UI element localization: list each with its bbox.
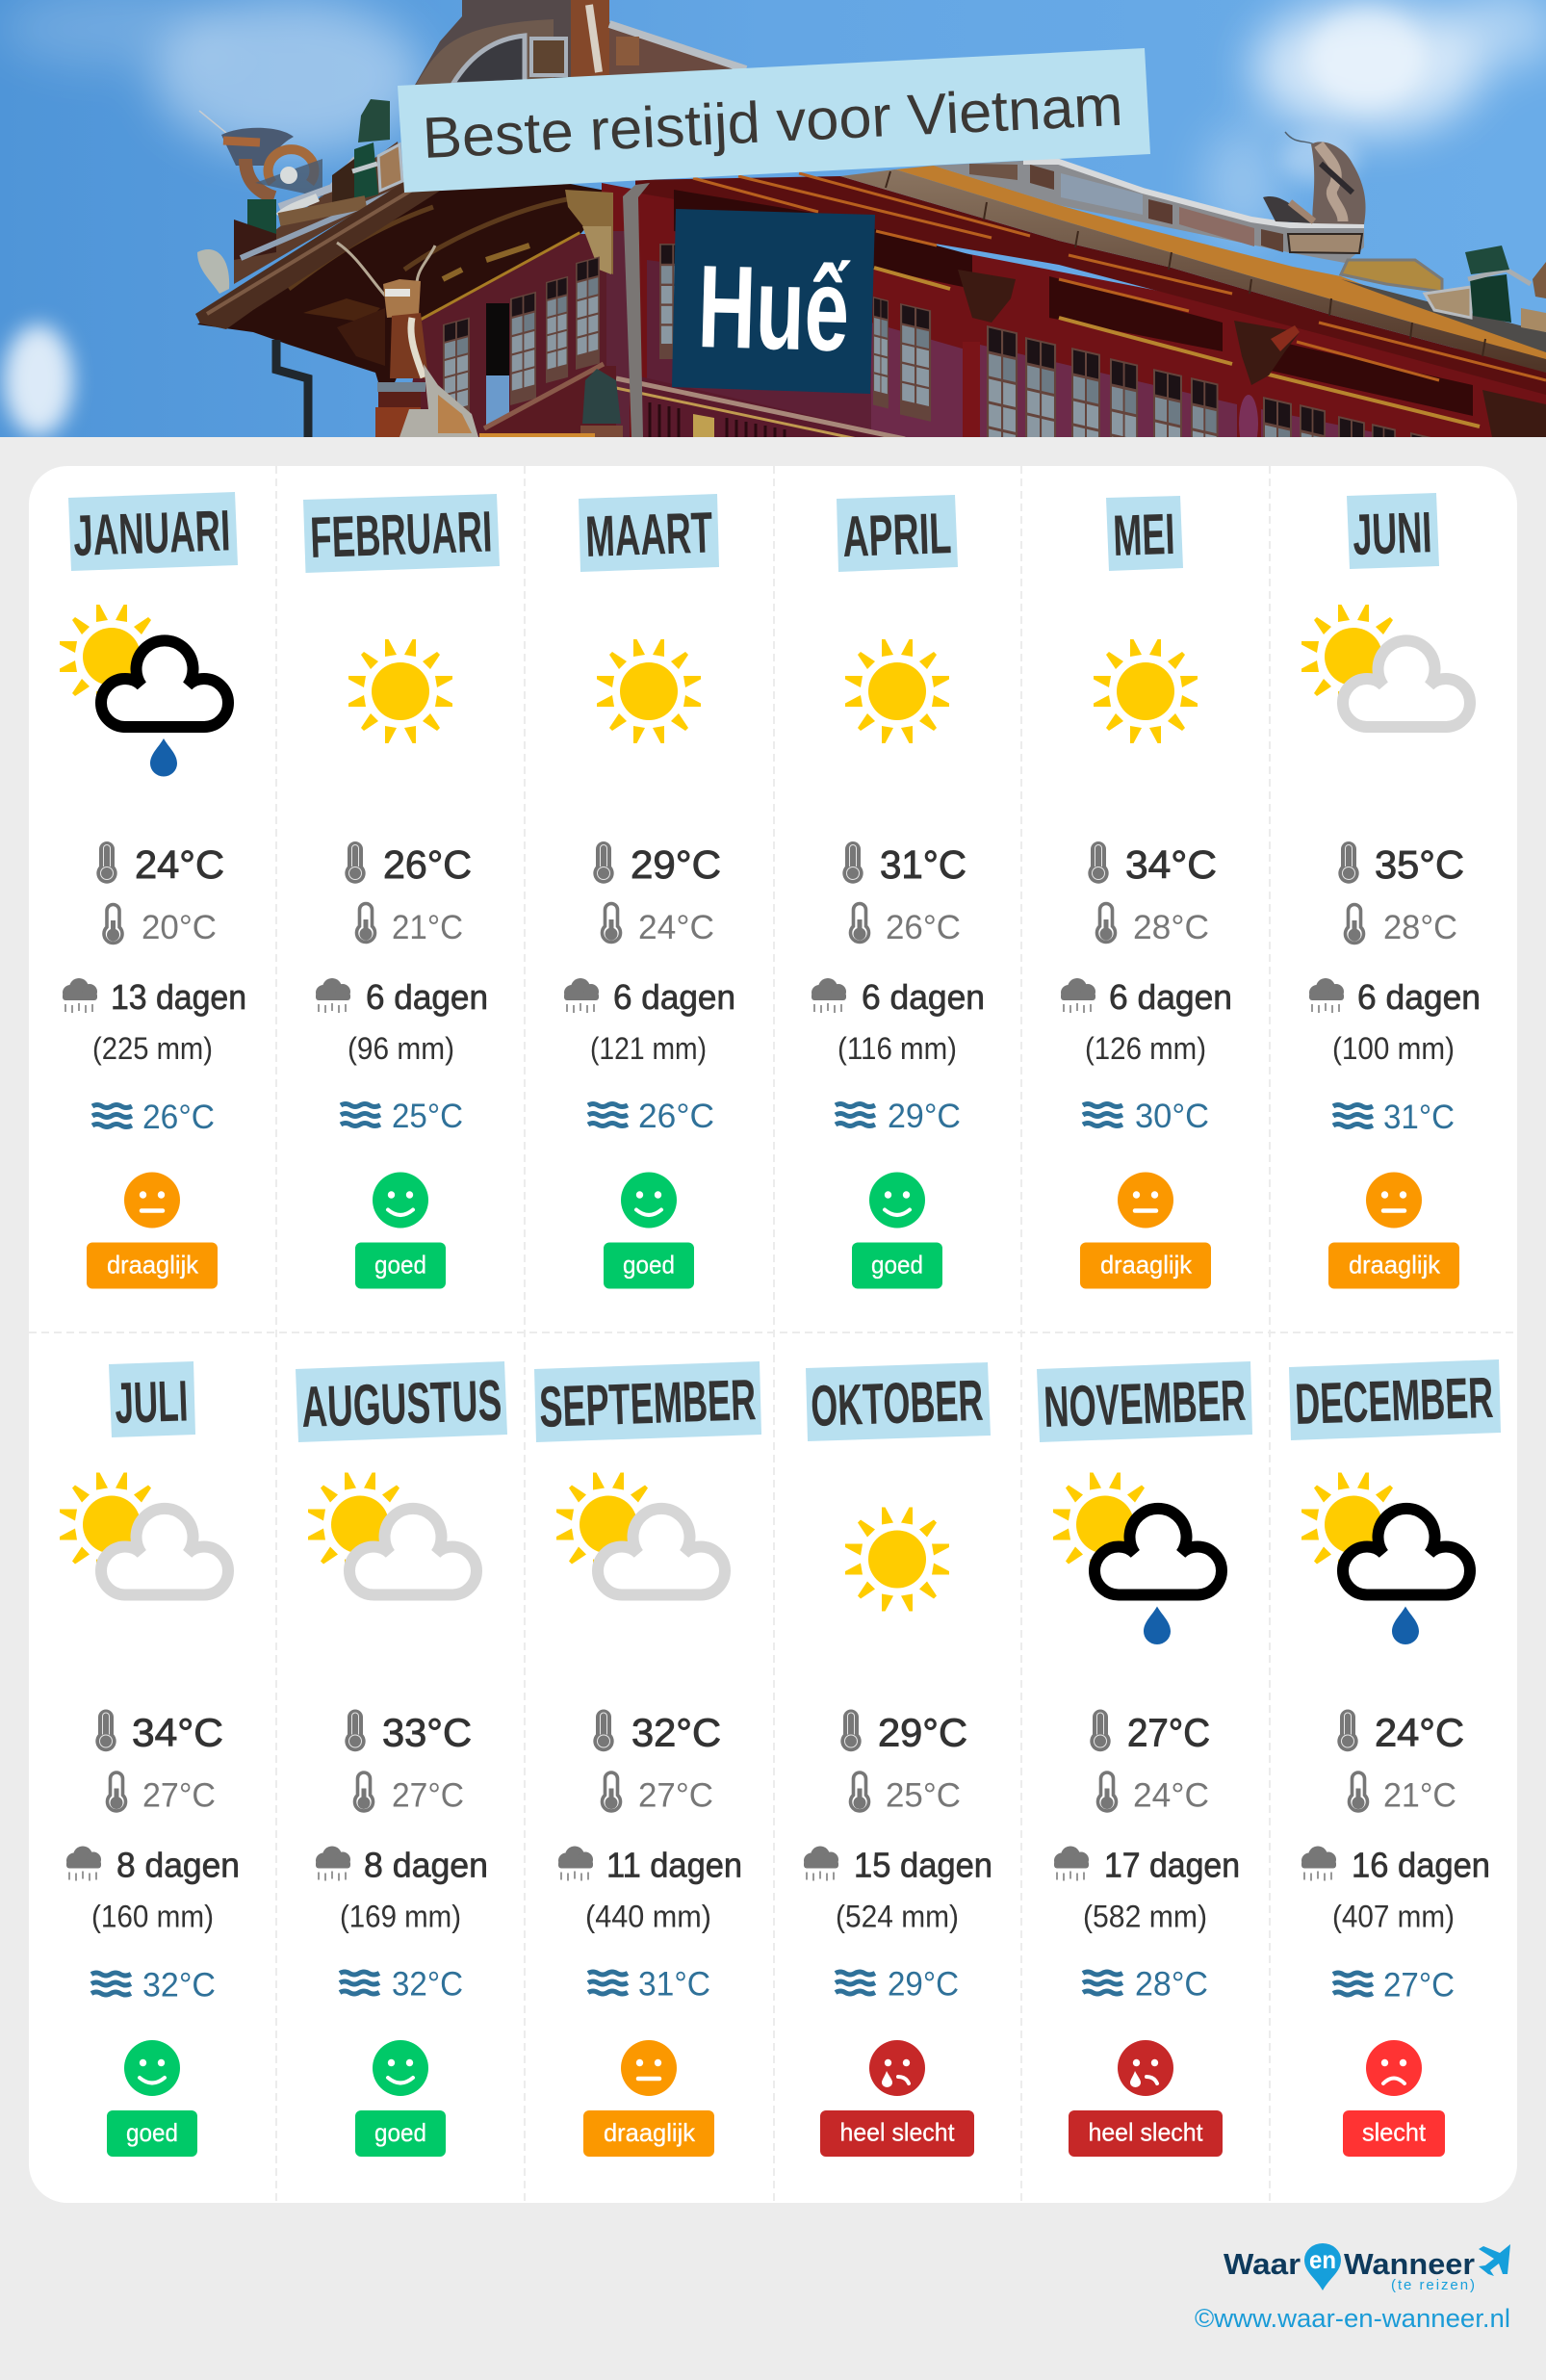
- rating face: [124, 2040, 180, 2096]
- rating face: [621, 2040, 677, 2096]
- icon: sun and rain cloud: [1053, 1473, 1222, 1644]
- sea temperature: 30°C: [1135, 1098, 1209, 1135]
- rating badge: [604, 1242, 694, 1288]
- rain days: [1054, 1845, 1240, 1885]
- month tag: [1347, 493, 1439, 569]
- column: augustus: [296, 1361, 507, 2157]
- min temperature: [851, 1772, 961, 1814]
- sea temperature: [341, 1098, 463, 1135]
- month tag: [109, 1361, 195, 1437]
- rainfall: (440 mm): [585, 1899, 711, 1933]
- month tag: APRIL: [841, 501, 952, 569]
- min temperature: [1097, 1772, 1209, 1814]
- max temperature: 24°C: [1375, 1710, 1464, 1754]
- rainfall: (96 mm): [348, 1031, 454, 1066]
- rainfall: (100 mm): [1332, 1031, 1455, 1066]
- sea temperature: 26°C: [638, 1098, 714, 1135]
- rainfall: (524 mm): [836, 1899, 959, 1933]
- rainfall: (126 mm): [1085, 1031, 1206, 1066]
- rating badge: goed: [623, 1250, 675, 1279]
- rating badge: goed: [871, 1250, 923, 1279]
- rain days: 6 dagen: [1109, 977, 1232, 1017]
- column: mei: [1061, 496, 1232, 1288]
- max temperature: [1088, 841, 1217, 887]
- max temperature: 35°C: [1375, 842, 1464, 887]
- min temperature: 21°C: [392, 909, 463, 946]
- ridge fence: [934, 161, 1364, 263]
- rating badge: heel slecht: [1088, 2118, 1203, 2147]
- max temperature: [1338, 841, 1464, 887]
- right dragon ornament: [1263, 132, 1366, 224]
- min temperature: [108, 1772, 216, 1814]
- rating badge: heel slecht: [839, 2118, 955, 2147]
- city name box: Huế: [672, 209, 875, 394]
- month tag: [303, 494, 500, 573]
- city name box: Huế: Huế: [696, 241, 851, 375]
- rain days: 15 dagen: [854, 1845, 992, 1885]
- month tag: JANUARI: [72, 498, 231, 568]
- max temperature: 29°C: [631, 842, 721, 887]
- sea temperature: [1333, 1966, 1455, 2005]
- min temperature: 28°C: [1133, 909, 1209, 946]
- rainfall: (582 mm): [1083, 1899, 1207, 1933]
- stair rail and statue: [484, 366, 616, 437]
- rating badge: [1343, 2110, 1445, 2157]
- month tag: [837, 495, 958, 572]
- rain days: 6 dagen: [862, 977, 985, 1017]
- month tag: [1037, 1361, 1252, 1442]
- max temperature: [345, 841, 472, 887]
- rating face: [621, 1173, 677, 1229]
- month tag: [68, 492, 238, 571]
- max temperature: 29°C: [878, 1710, 967, 1754]
- rain days: 11 dagen: [606, 1845, 742, 1885]
- brackets: [1234, 321, 1300, 385]
- column: juni: [1301, 493, 1481, 1288]
- column: februari: [303, 494, 500, 1288]
- max temperature: 24°C: [135, 842, 224, 887]
- rain days: 6 dagen: [366, 977, 488, 1017]
- min temperature: [1346, 905, 1457, 946]
- rating face: [1118, 2040, 1173, 2096]
- max temperature: 27°C: [1127, 1710, 1210, 1754]
- rating face: [869, 1173, 925, 1229]
- rating badge: [1080, 1242, 1211, 1288]
- rain days: 8 dagen: [364, 1845, 488, 1885]
- max temperature: 33°C: [382, 1710, 472, 1754]
- icon: sun and grey cloud: [60, 1473, 228, 1594]
- lower balcony and railing: [641, 377, 884, 437]
- drain pipe: [276, 340, 308, 437]
- max temperature: [1090, 1710, 1210, 1754]
- icon: sun and rain cloud: [1301, 1473, 1470, 1644]
- min temperature: 28°C: [1383, 909, 1457, 946]
- icon: sun: [1094, 639, 1198, 743]
- title banner: Beste reistijd voor Vietnam: [421, 73, 1124, 170]
- max temperature: 31°C: [880, 842, 966, 887]
- sea temperature: [588, 1966, 710, 2003]
- sea temperature: 31°C: [1383, 1099, 1455, 1136]
- upper dark beams, right side: [635, 176, 1546, 395]
- rating face: [1366, 2040, 1422, 2096]
- icon: map pin: en: [1309, 2245, 1336, 2274]
- logo: Waar en Wanneer: Wanneer: [1344, 2247, 1475, 2281]
- month tag: [806, 1362, 991, 1441]
- rating face: [869, 2040, 925, 2096]
- sea temperature: [92, 1099, 215, 1136]
- sea temperature: [1083, 1966, 1208, 2003]
- max temperature: [345, 1710, 472, 1754]
- rating face: [1366, 1173, 1422, 1229]
- rating badge: draaglijk: [107, 1250, 199, 1279]
- max temperature: [593, 1710, 721, 1754]
- month tag: [534, 1361, 761, 1442]
- month tag: MEI: [1112, 502, 1175, 568]
- min temperature: 25°C: [886, 1777, 961, 1814]
- column: juli: [60, 1361, 240, 2157]
- column: april: [812, 495, 985, 1288]
- rainfall: (407 mm): [1332, 1899, 1455, 1933]
- rain days: 13 dagen: [111, 977, 246, 1017]
- min temperature: 27°C: [392, 1777, 464, 1814]
- metal pipe: [623, 183, 650, 437]
- max temperature: [593, 841, 721, 887]
- rating badge: goed: [374, 1250, 426, 1279]
- max temperature: 34°C: [1125, 842, 1217, 887]
- rating badge: goed: [374, 2118, 426, 2147]
- rating badge: [355, 2110, 446, 2157]
- month tag: [296, 1361, 507, 1442]
- orange roof surface: [895, 166, 1546, 361]
- sea temperature: 29°C: [888, 1966, 959, 2003]
- rating badge: draaglijk: [604, 2118, 696, 2147]
- windows: [443, 244, 1430, 437]
- month tag: [1106, 496, 1183, 571]
- sea temperature: 29°C: [888, 1098, 961, 1135]
- icon: plane: [1479, 2244, 1510, 2276]
- month tag: JUNI: [1352, 500, 1432, 567]
- icon: sun: [845, 1508, 949, 1612]
- rainfall: (121 mm): [590, 1031, 707, 1066]
- icon: sun: [597, 639, 701, 743]
- rain days: 8 dagen: [116, 1845, 240, 1885]
- month tag: OKTOBER: [810, 1368, 984, 1438]
- left gutter: [195, 183, 445, 329]
- min temperature: [1097, 903, 1209, 946]
- left ridge dragon ornament: [197, 99, 404, 294]
- row: second half of the year: [60, 1359, 1501, 2157]
- copyright: ©www.waar-en-wanneer.nl: [1195, 2304, 1510, 2333]
- max temperature: 32°C: [631, 1710, 721, 1754]
- rating badge: [852, 1242, 942, 1288]
- rating face: [124, 1173, 180, 1229]
- icon: map pin: [1304, 2243, 1341, 2290]
- rating badge: slecht: [1362, 2118, 1427, 2147]
- logo: Waar en Wanneer: [1224, 2243, 1510, 2293]
- rainfall: (225 mm): [92, 1031, 213, 1066]
- min temperature: [104, 905, 217, 946]
- rating badge: [355, 1242, 446, 1288]
- min temperature: [354, 1772, 464, 1814]
- title banner: [398, 48, 1150, 193]
- month tag: [579, 494, 719, 572]
- max temperature: [840, 1710, 967, 1754]
- rating badge: draaglijk: [1100, 1250, 1193, 1279]
- month tag: JULI: [114, 1368, 189, 1436]
- rating face: [373, 2040, 428, 2096]
- column: maart: [564, 494, 735, 1288]
- column: januari: [60, 492, 246, 1288]
- rainfall: (116 mm): [837, 1031, 957, 1066]
- rating face: [1118, 1173, 1173, 1229]
- rating badge: [820, 2110, 974, 2157]
- rating badge: [1328, 1242, 1459, 1288]
- min temperature: 27°C: [638, 1777, 713, 1814]
- dragon post: [337, 243, 595, 437]
- sea temperature: 26°C: [142, 1099, 215, 1136]
- icon: sun and grey cloud: [308, 1473, 477, 1594]
- sea temperature: [340, 1966, 463, 2003]
- column: november: [1037, 1361, 1252, 2157]
- sea temperature: [91, 1966, 216, 2005]
- sea temperature: [836, 1098, 961, 1135]
- rating badge: [1069, 2110, 1223, 2157]
- rating badge: goed: [126, 2118, 178, 2147]
- rain days: [316, 977, 488, 1017]
- rating badge: [87, 1242, 218, 1288]
- max temperature: [95, 1710, 223, 1754]
- max temperature: [1337, 1710, 1464, 1754]
- sea temperature: 31°C: [638, 1966, 710, 2003]
- month tag: NOVEMBER: [1043, 1368, 1247, 1439]
- min temperature: 24°C: [1133, 1777, 1209, 1814]
- min temperature: 27°C: [142, 1777, 216, 1814]
- sea temperature: 32°C: [392, 1966, 463, 2003]
- sea temperature: [1083, 1098, 1209, 1135]
- gable: [414, 0, 571, 87]
- month tag: AUGUSTUS: [300, 1368, 502, 1439]
- min temperature: [603, 903, 714, 946]
- rain days: 6 dagen: [1357, 977, 1481, 1017]
- min temperature: [851, 903, 961, 946]
- icon: sun and grey cloud: [556, 1473, 725, 1594]
- month tag: MAART: [584, 500, 713, 569]
- sea temperature: [588, 1098, 714, 1135]
- icon: sun and rain cloud: [60, 605, 228, 776]
- min temperature: 21°C: [1383, 1777, 1456, 1814]
- rain days: 17 dagen: [1104, 1845, 1240, 1885]
- min temperature: [603, 1772, 713, 1814]
- max temperature: [96, 841, 224, 887]
- sea temperature: 27°C: [1383, 1966, 1455, 2005]
- max temperature: 26°C: [383, 842, 472, 887]
- column: oktober: [804, 1362, 992, 2157]
- main wall: [602, 183, 1546, 437]
- column: december: [1289, 1359, 1501, 2157]
- left eave underside: [197, 184, 602, 382]
- panel: climate table card: [29, 466, 1517, 2203]
- icon: sun: [348, 639, 452, 743]
- max temperature: [842, 841, 966, 887]
- month tag: FEBRUARI: [309, 499, 493, 570]
- logo: Waar en Wanneer: Waar: [1224, 2247, 1301, 2281]
- sea temperature: [836, 1966, 959, 2003]
- min temperature: 26°C: [886, 909, 961, 946]
- rating badge: [583, 2110, 714, 2157]
- column: september: [534, 1361, 761, 2157]
- min temperature: 24°C: [638, 909, 714, 946]
- icon: sun and grey cloud: [1301, 605, 1470, 727]
- rainfall: (169 mm): [340, 1899, 461, 1933]
- sea temperature: [1333, 1099, 1455, 1136]
- rating face: [373, 1173, 428, 1229]
- min temperature: 20°C: [142, 909, 217, 946]
- left wall bracket: [565, 190, 613, 274]
- sea temperature: 28°C: [1135, 1966, 1208, 2003]
- rating badge: [107, 2110, 197, 2157]
- rainfall: (160 mm): [91, 1899, 214, 1933]
- sea temperature: 25°C: [392, 1098, 463, 1135]
- rating badge: draaglijk: [1349, 1250, 1441, 1279]
- icon: sun: [845, 639, 949, 743]
- right roof structures: [1341, 246, 1546, 352]
- month tag: SEPTEMBER: [538, 1367, 757, 1439]
- min temperature: [1350, 1772, 1456, 1814]
- logo: Waar en Wanneer: (te reizen): [1391, 2277, 1475, 2293]
- rain days: 16 dagen: [1352, 1845, 1490, 1885]
- pillars: [1239, 395, 1258, 437]
- gutter: [840, 169, 1546, 373]
- min temperature: [356, 903, 463, 946]
- rain days: 6 dagen: [613, 977, 735, 1017]
- hero photo: Vietnamese palace roof against the sky: [0, 0, 1546, 437]
- sea temperature: 32°C: [142, 1966, 216, 2005]
- max temperature: 34°C: [132, 1710, 223, 1754]
